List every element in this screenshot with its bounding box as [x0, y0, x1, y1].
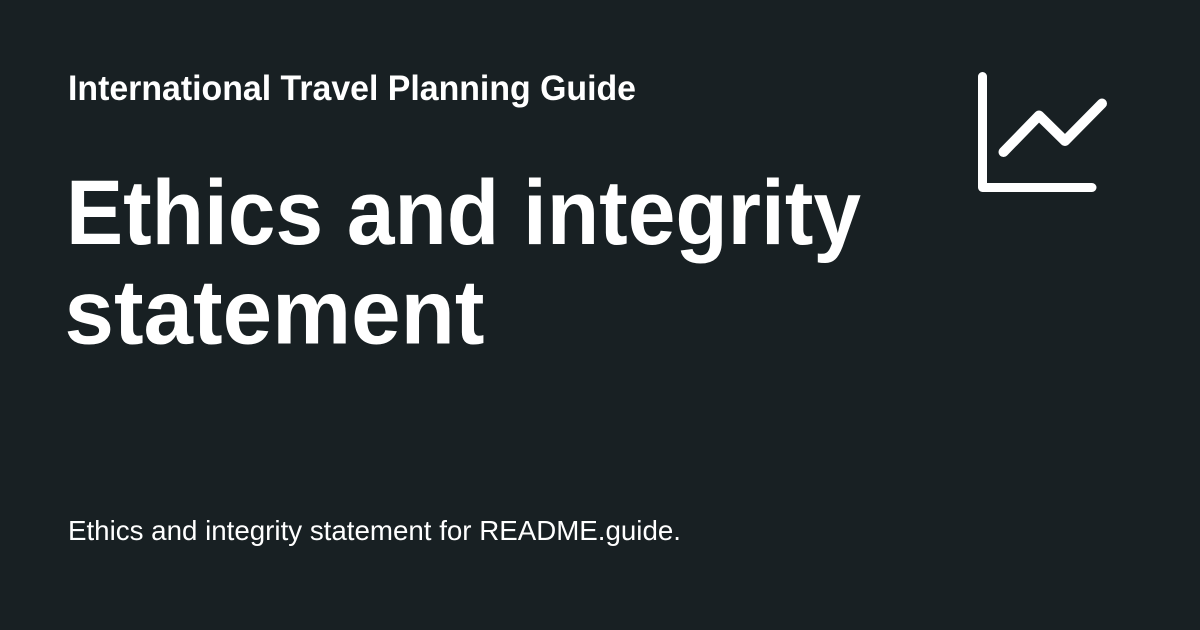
- icon: line chart: [982, 76, 1102, 188]
- description: Ethics and integrity statement for README.guide.: [68, 515, 681, 546]
- title: [64, 162, 861, 364]
- title: Ethics and integrity: [66, 162, 861, 264]
- title: statement: [64, 262, 484, 364]
- eyebrow heading: International Travel Planning Guide: [68, 69, 636, 108]
